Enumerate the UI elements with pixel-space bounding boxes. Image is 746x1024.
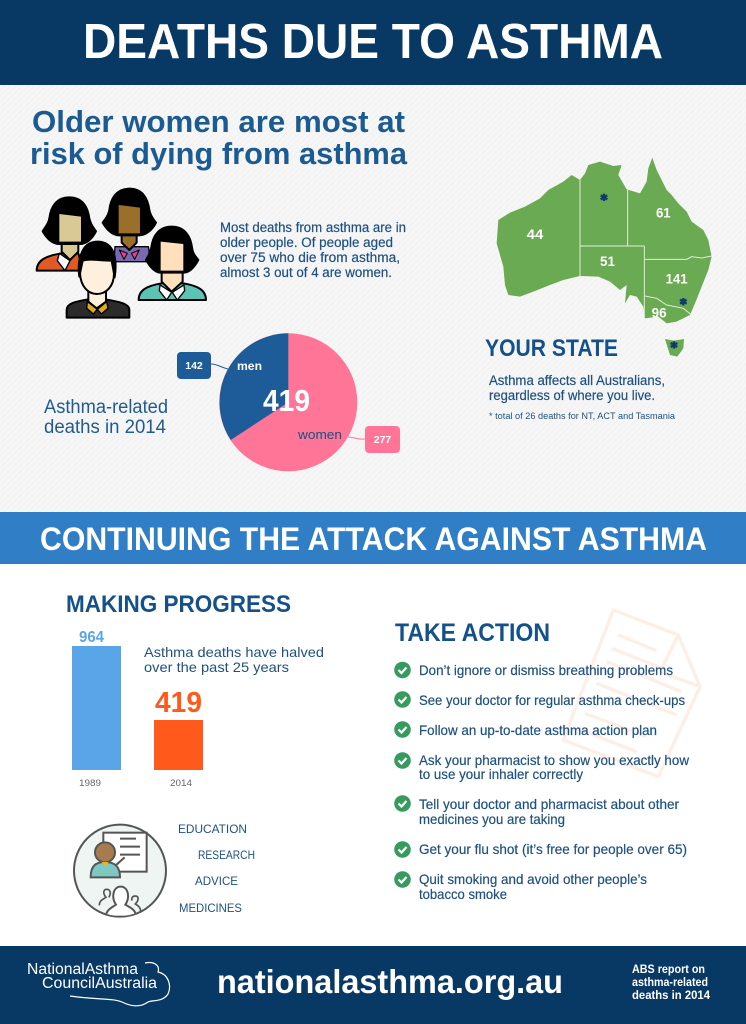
text: your state bbox=[489, 373, 675, 421]
bar chart bbox=[72, 629, 203, 788]
axis label 2014: 2014 bbox=[170, 778, 192, 788]
axis label 1989: 1989 bbox=[79, 778, 101, 788]
header banner bbox=[0, 0, 746, 85]
label: men: men bbox=[237, 359, 262, 373]
checklist: Follow an up-to-date asthma action plan bbox=[419, 722, 657, 738]
heading: your state: YOUR STATE bbox=[485, 335, 618, 362]
bar 2014 bbox=[154, 720, 203, 770]
icon: man front bbox=[67, 242, 129, 318]
heading: older women bbox=[30, 104, 408, 171]
audience bbox=[99, 887, 141, 917]
heading: take action: TAKE ACTION bbox=[395, 619, 550, 647]
checklist: Don’t ignore or dismiss breathing problems bbox=[419, 662, 673, 678]
icon: woman back bbox=[103, 189, 156, 262]
callout: women 277: 277 bbox=[374, 434, 391, 446]
text: deaths halved: Asthma deaths have halved bbox=[144, 644, 324, 660]
text: deaths halved: over the past 25 years bbox=[144, 659, 289, 675]
map of Australia bbox=[497, 158, 712, 357]
check icons bbox=[394, 662, 411, 888]
list: services bbox=[178, 822, 255, 915]
list: services: MEDICINES bbox=[179, 901, 242, 915]
checklist bbox=[394, 662, 690, 902]
logo cloud bbox=[70, 963, 170, 1006]
checklist: tobacco smoke bbox=[419, 886, 507, 902]
list: services: EDUCATION bbox=[178, 822, 247, 836]
checklist: Tell your doctor and pharmacist about other bbox=[419, 796, 679, 812]
text: most deaths: older people. Of people aged bbox=[220, 235, 393, 250]
logo: CouncilAustralia bbox=[42, 975, 157, 992]
list: services: RESEARCH bbox=[198, 848, 255, 862]
state figures bbox=[527, 204, 688, 320]
callout: men 142 bbox=[177, 352, 228, 379]
text: your state: Asthma affects all Australians, bbox=[489, 373, 665, 388]
label: asthma-related deaths bbox=[44, 397, 168, 438]
icon: teacher with audience bbox=[74, 825, 166, 917]
callout: women 277 bbox=[348, 426, 400, 453]
text: most deaths: over 75 who die from asthma, bbox=[220, 250, 400, 265]
value 964: 964 bbox=[79, 629, 104, 646]
text: your state: * total of 26 deaths for NT, ACT and Tasmania bbox=[489, 411, 675, 421]
text: most deaths: Most deaths from asthma are in bbox=[220, 220, 406, 235]
footer bbox=[0, 946, 746, 1024]
label: asthma-related deaths: Asthma-related bbox=[44, 397, 168, 418]
checklist: to use your inhaler correctly bbox=[419, 766, 583, 782]
label: women: women bbox=[297, 427, 342, 442]
source note: ABS report on bbox=[632, 964, 705, 976]
source note: asthma-related bbox=[632, 977, 708, 989]
heading: making progress: MAKING PROGRESS bbox=[66, 591, 291, 618]
text: most deaths: almost 3 out of 4 are women. bbox=[220, 265, 392, 280]
checklist: Ask your pharmacist to show you exactly how bbox=[419, 752, 690, 768]
total: 419 bbox=[263, 383, 310, 418]
heading: older women: risk of dying from asthma bbox=[30, 136, 408, 171]
state figures: 51 bbox=[600, 253, 615, 269]
checklist: medicines you are taking bbox=[419, 811, 565, 827]
check marks bbox=[398, 668, 406, 882]
state borders bbox=[580, 180, 712, 318]
Tasmania bbox=[665, 339, 684, 357]
checklist: Quit smoking and avoid other people’s bbox=[419, 871, 647, 887]
text: your state: regardless of where you live. bbox=[489, 388, 655, 403]
icon: group of people bbox=[37, 189, 206, 318]
pie chart bbox=[219, 333, 357, 471]
text: deaths halved bbox=[144, 644, 324, 675]
icon: woman left bbox=[37, 197, 96, 271]
website: nationalasthma.org.au bbox=[217, 963, 563, 1000]
slice: men bbox=[219, 333, 288, 440]
list: services: ADVICE bbox=[195, 874, 238, 888]
source note bbox=[632, 964, 711, 1002]
section banner bbox=[0, 512, 746, 564]
state figures: 96 bbox=[652, 304, 667, 320]
state figures: 44 bbox=[527, 226, 544, 242]
title: DEATHS DUE TO ASTHMA bbox=[83, 15, 663, 69]
callout: men 142: 142 bbox=[185, 360, 203, 372]
state figures: 61 bbox=[656, 204, 671, 220]
state figures: 141 bbox=[666, 270, 688, 286]
text: most deaths bbox=[220, 220, 406, 280]
logo bbox=[27, 961, 170, 1006]
checklist: Get your flu shot (it’s free for people over 65) bbox=[419, 841, 687, 857]
section heading: CONTINUING THE ATTACK AGAINST ASTHMA bbox=[40, 521, 707, 557]
value 419: 419 bbox=[155, 687, 202, 719]
label: asthma-related deaths: deaths in 2014 bbox=[44, 417, 166, 438]
heading: older women: Older women are most at bbox=[32, 104, 405, 139]
checklist: See your doctor for regular asthma check-ups bbox=[419, 692, 685, 708]
bar 1989 bbox=[72, 646, 121, 770]
icon: woman right bbox=[139, 227, 206, 300]
watermark: document icon bbox=[563, 610, 700, 777]
source note: deaths in 2014 bbox=[632, 990, 711, 1002]
logo: NationalAsthma bbox=[27, 961, 138, 978]
asterisk markers bbox=[601, 194, 687, 349]
mainland bbox=[497, 158, 712, 323]
